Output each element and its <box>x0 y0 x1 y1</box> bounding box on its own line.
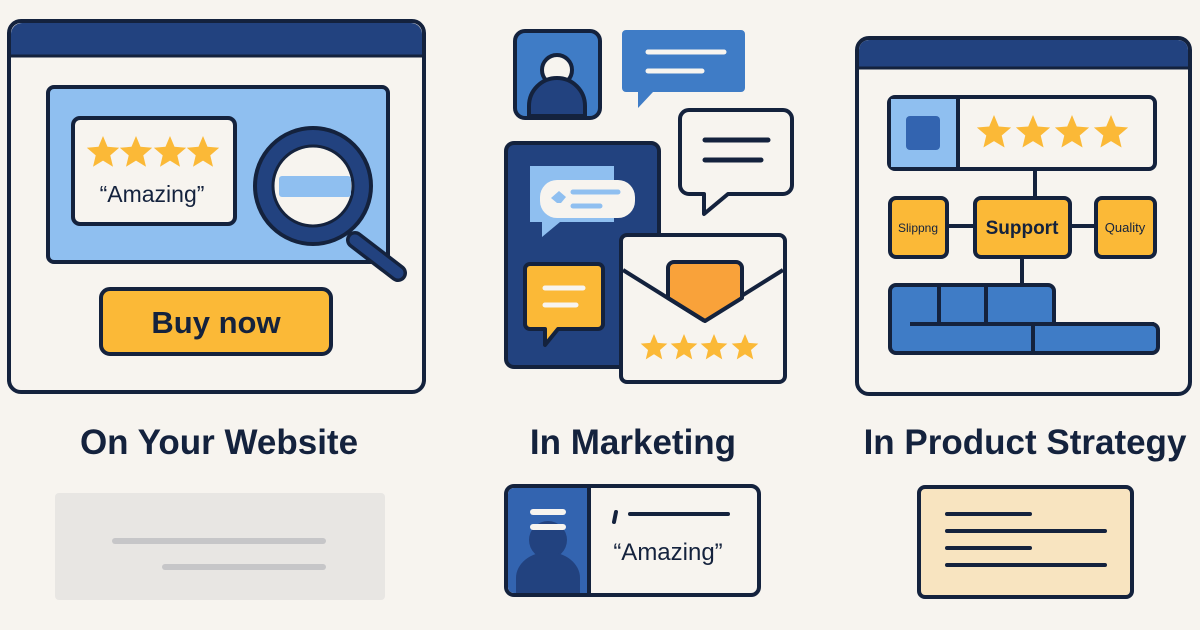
category boxes: Support <box>986 218 1059 239</box>
bubble: blue <box>622 30 745 108</box>
panel: marketing <box>506 30 792 382</box>
button: buy now: Buy now <box>151 305 281 340</box>
heading: in marketing: In Marketing <box>530 423 736 462</box>
review card: “Amazing” <box>100 181 204 207</box>
rating card <box>889 97 1155 169</box>
heading: on your website: On Your Website <box>80 423 358 462</box>
light blue area <box>48 87 388 262</box>
card: testimonial <box>506 486 759 595</box>
button: buy now <box>101 289 331 354</box>
panel: website <box>9 21 424 392</box>
icon: envelope <box>621 235 785 382</box>
icon: avatar <box>515 31 600 118</box>
category boxes <box>890 198 1155 257</box>
panel: product strategy <box>857 38 1190 394</box>
category boxes: Slippng <box>898 221 938 235</box>
review card <box>73 118 235 224</box>
card: gray placeholder <box>55 493 385 600</box>
heading: in product strategy: In Product Strategy <box>864 423 1187 462</box>
phone <box>506 143 659 367</box>
bubble: white <box>680 110 792 214</box>
category boxes: Quality <box>1105 220 1146 235</box>
card: notes <box>919 487 1132 597</box>
icon: magnifier <box>255 128 398 273</box>
card: testimonial: “Amazing” <box>613 539 723 566</box>
blocks <box>890 285 1158 353</box>
